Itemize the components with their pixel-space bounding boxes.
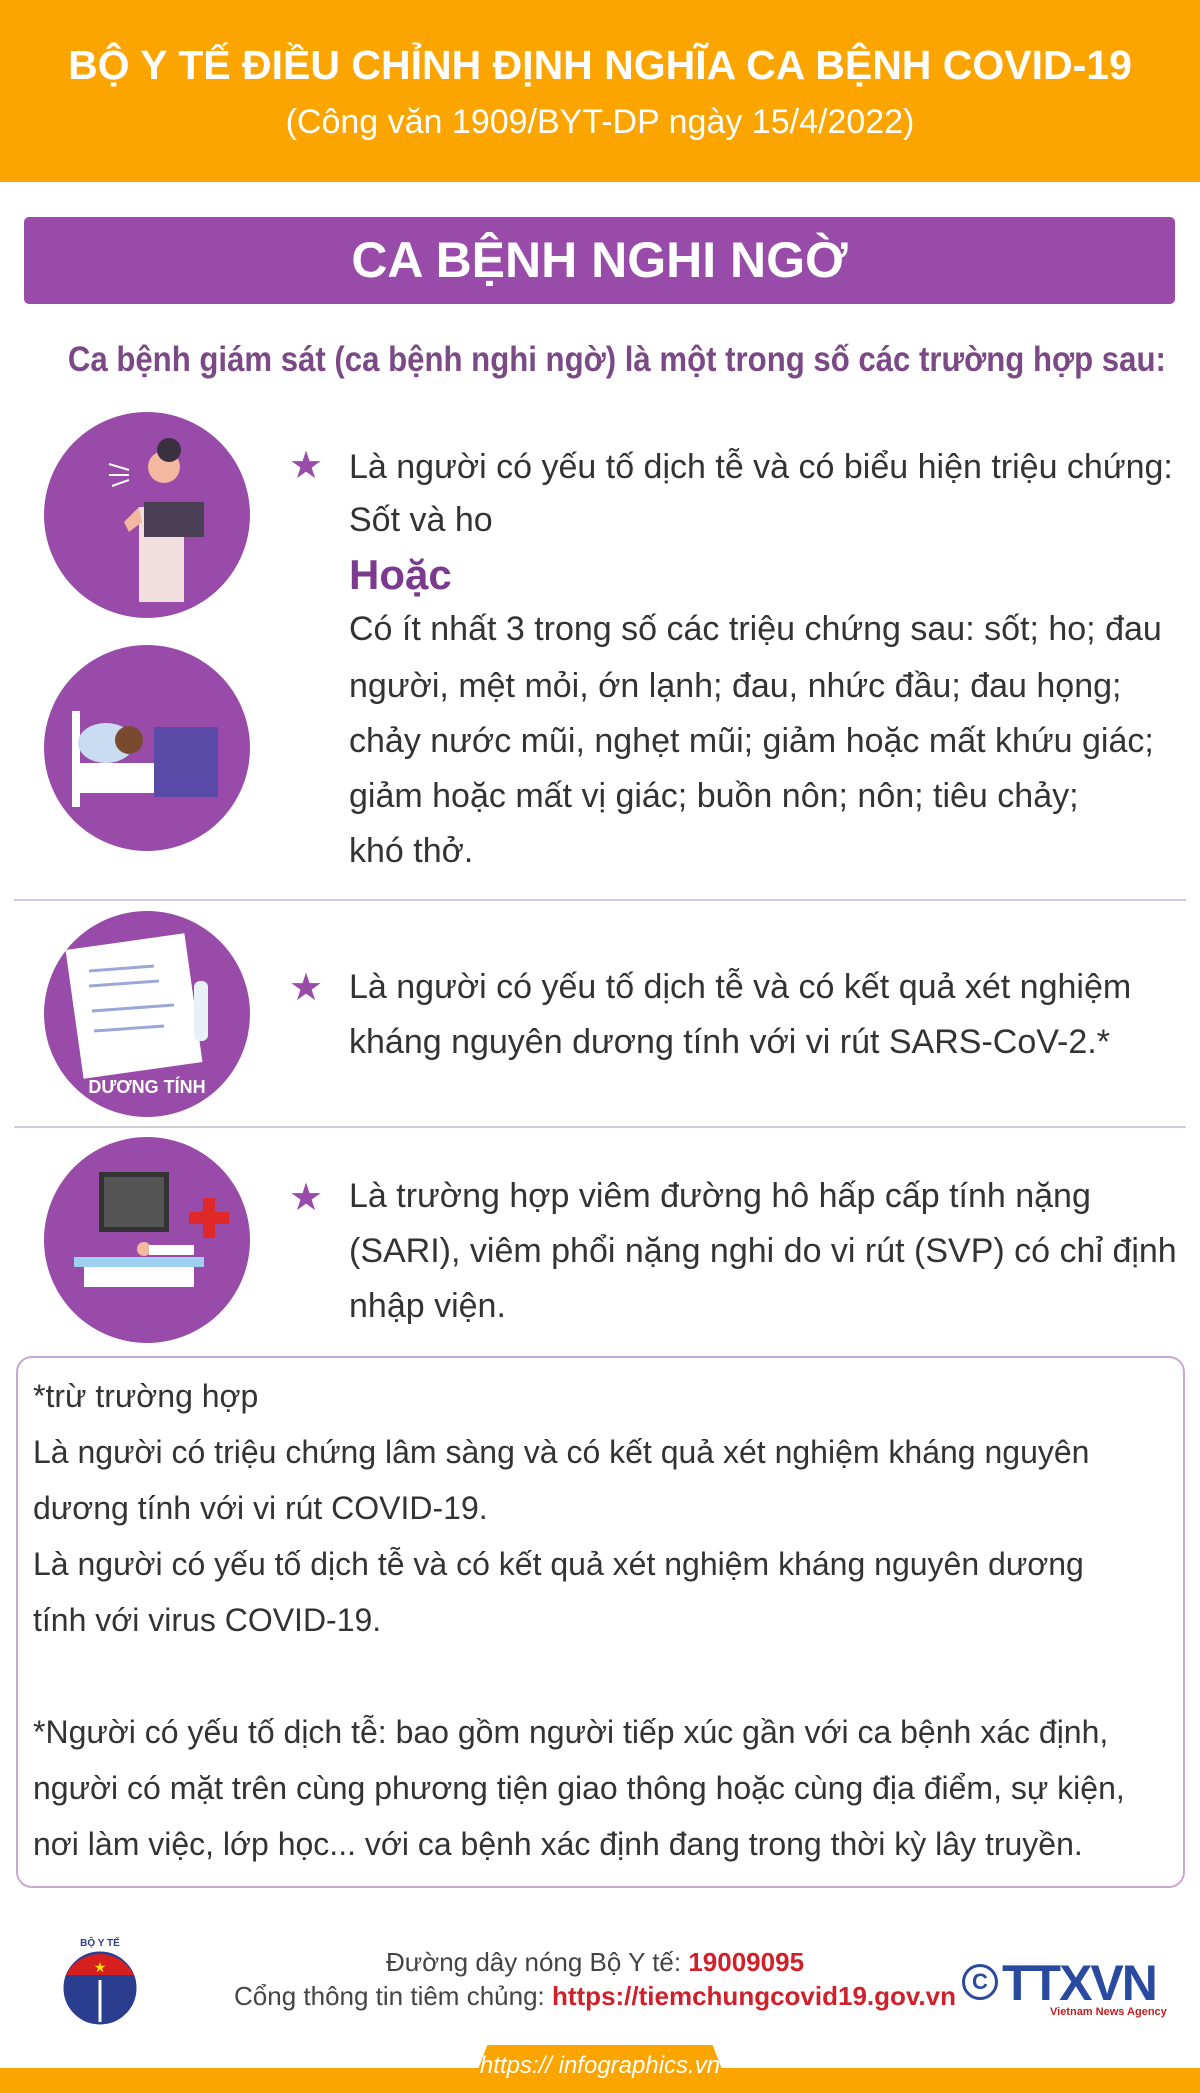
star 2: ★ (289, 967, 323, 1009)
star 3: ★ (289, 1177, 323, 1219)
text block 2: Là người có yếu tố dịch tễ và có kết quả xét nghiệm (349, 968, 1131, 1006)
text: Có ít nhất 3 trong số các triệu chứng sau: sốt; ho; đau (349, 610, 1162, 648)
text: giảm hoặc mất vị giác; buồn nôn; nôn; tiêu chảy; (349, 777, 1079, 815)
icon: hospital bed (44, 1137, 250, 1343)
logo: TTXVN: TTXVN (1002, 1955, 1156, 2011)
icon: coughing woman (44, 412, 250, 618)
text: Là người có yếu tố dịch tễ và có biểu hiện triệu chứng: (349, 448, 1173, 486)
icon: sick man in bed (44, 645, 250, 851)
note text: Là người có yếu tố dịch tễ và có kết quả xét nghiệm kháng nguyên dương (33, 1546, 1084, 1582)
title: BỘ Y TẾ ĐIỀU CHỈNH ĐỊNH NGHĨA CA BỆNH COVID-19 (68, 42, 1132, 88)
note box (16, 1356, 1185, 1888)
text: khó thở. (349, 832, 473, 870)
star: ★ (289, 445, 323, 487)
icon: positive test (44, 911, 250, 1117)
text block 3 (349, 1177, 1177, 1325)
text block 3: nhập viện. (349, 1287, 506, 1325)
logo: TTXVN: C (972, 1969, 988, 1994)
note text: dương tính với vi rút COVID-19. (33, 1490, 488, 1526)
logo: ministry of health (64, 1936, 136, 2024)
subtitle: (Công văn 1909/BYT-DP ngày 15/4/2022) (286, 103, 914, 141)
header (0, 0, 1200, 182)
note text: nơi làm việc, lớp học... với ca bệnh xác định đang trong thời kỳ lây truyền. (33, 1826, 1083, 1862)
footer tab url: https:// infographics.vn (480, 2052, 720, 2079)
text: chảy nước mũi, nghẹt mũi; giảm hoặc mất khứu giác; (349, 722, 1154, 760)
logo: ministry of health: BỘ Y TẾ (80, 1936, 120, 1949)
text: Sốt và ho (349, 501, 493, 539)
text: người, mệt mỏi, ớn lạnh; đau, nhức đầu; đau họng; (349, 667, 1121, 705)
text block 3: (SARI), viêm phổi nặng nghi do vi rút (SVP) có chỉ định (349, 1232, 1177, 1270)
section banner: CA BỆNH NGHI NGỜ (351, 232, 848, 288)
footer bar (0, 2068, 1200, 2093)
intro text: Ca bệnh giám sát (ca bệnh nghi ngờ) là một trong số các trường hợp sau: (68, 340, 1166, 379)
section banner (24, 217, 1175, 304)
logo: TTXVN: Vietnam News Agency (1050, 2006, 1167, 2018)
hoac label: Hoặc (349, 551, 452, 598)
logo: ministry of health: ★ (94, 1959, 106, 1975)
footer contact (234, 1947, 956, 2011)
note text: *trừ trường hợp (33, 1378, 258, 1414)
note text: tính với virus COVID-19. (33, 1602, 381, 1638)
logo: TTXVN (962, 1955, 1167, 2018)
note text: *Người có yếu tố dịch tễ: bao gồm người tiếp xúc gần với ca bệnh xác định, (33, 1714, 1108, 1750)
note text (33, 1378, 1125, 1862)
text block 2 (349, 968, 1131, 1061)
footer contact: Đường dây nóng Bộ Y tế: 19009095 (386, 1947, 804, 1977)
text block 2: kháng nguyên dương tính với vi rút SARS-CoV-2.* (349, 1023, 1110, 1061)
icon: positive test: DƯƠNG TÍNH (88, 1076, 206, 1097)
note text: Là người có triệu chứng lâm sàng và có kết quả xét nghiệm kháng nguyên (33, 1434, 1089, 1470)
note text: người có mặt trên cùng phương tiện giao thông hoặc cùng địa điểm, sự kiện, (33, 1770, 1125, 1806)
footer contact: Cổng thông tin tiêm chủng: https://tiemchungcovid19.gov.vn (234, 1981, 956, 2011)
text block 3: Là trường hợp viêm đường hô hấp cấp tính nặng (349, 1177, 1091, 1215)
